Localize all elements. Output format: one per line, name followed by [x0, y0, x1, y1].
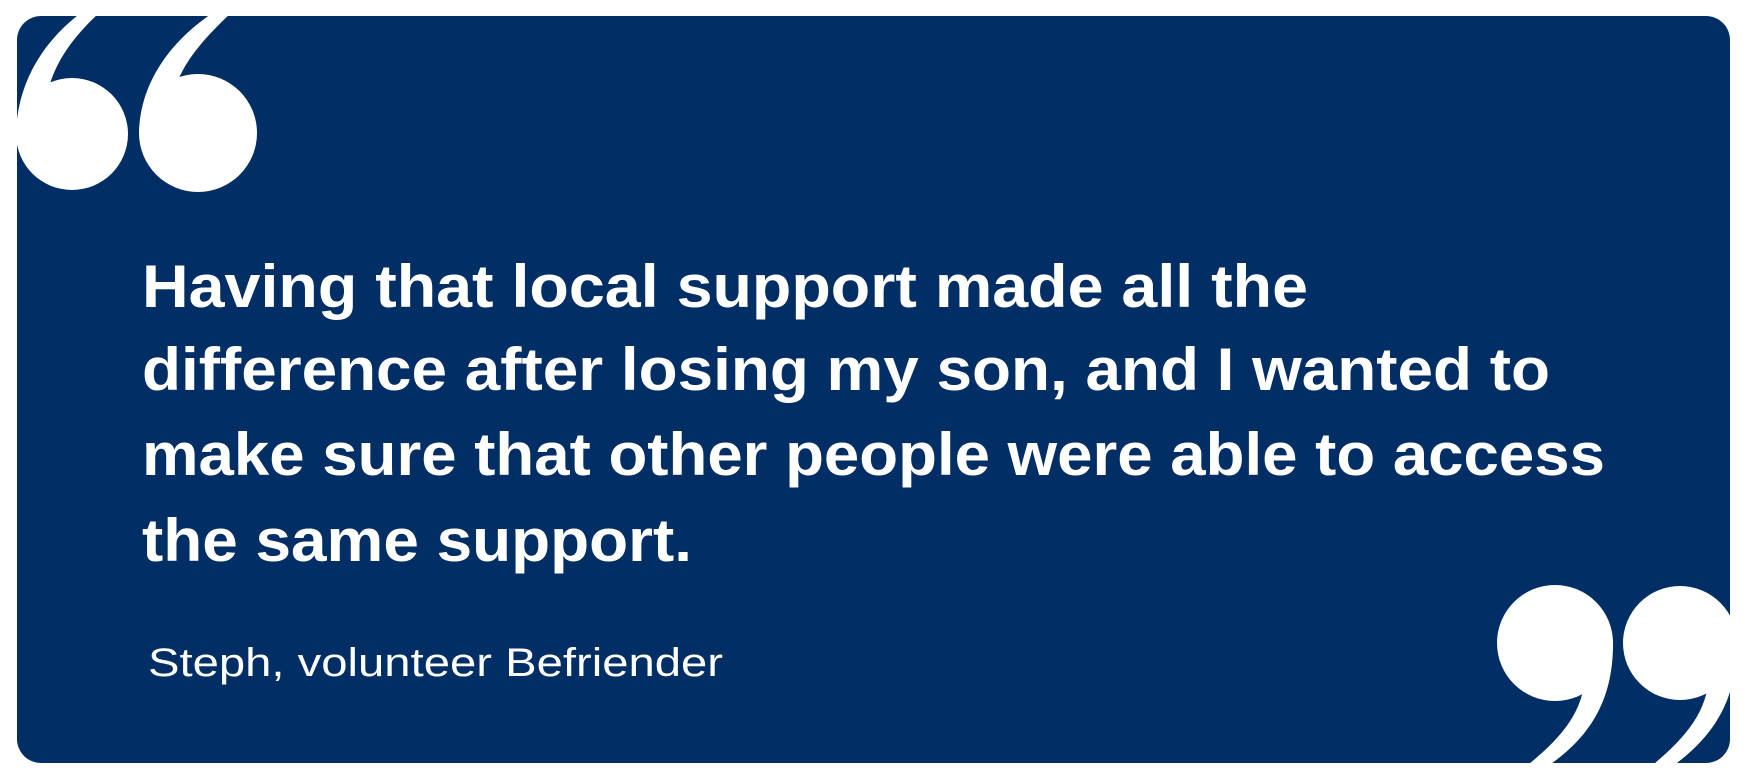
quote text: the same support.	[142, 507, 692, 574]
attribution: Steph, volunteer Befriender	[148, 641, 723, 685]
quote text: Having that local support made all the	[142, 253, 1308, 320]
icon: closing quote marks	[1497, 585, 1737, 768]
quote text: make sure that other people were able to access	[142, 421, 1605, 488]
icon: opening quote marks	[16, 12, 257, 192]
quote text: difference after losing my son, and I wanted to	[142, 336, 1550, 403]
quote text	[142, 253, 1605, 574]
